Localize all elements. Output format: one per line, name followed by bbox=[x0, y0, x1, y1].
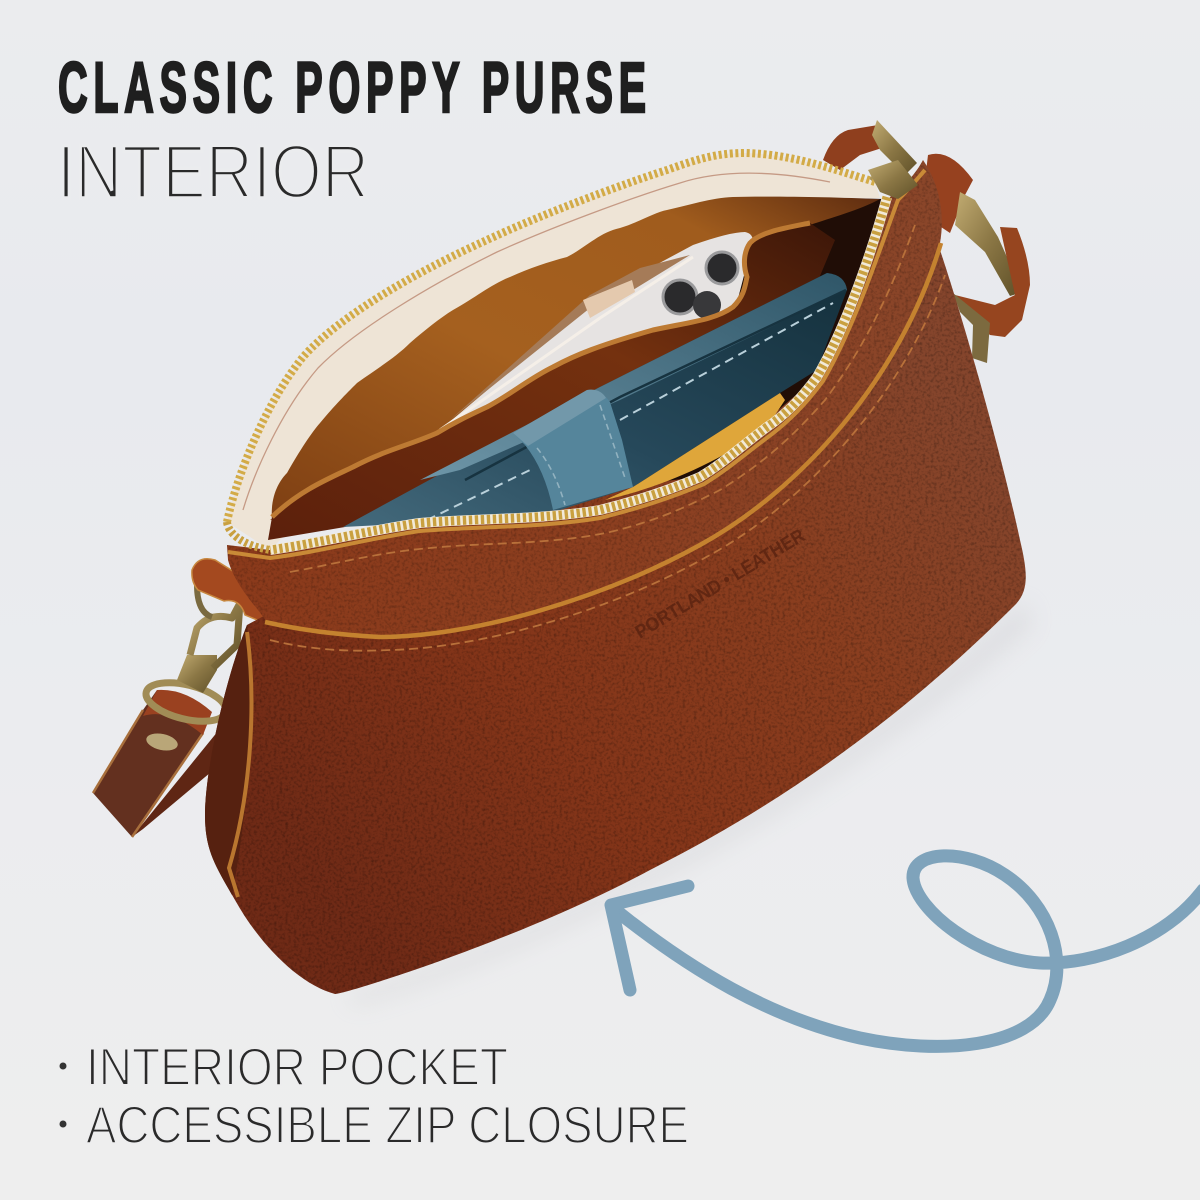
subtitle: INTERIOR bbox=[57, 130, 369, 215]
purse illustration bbox=[93, 120, 1032, 1005]
flap edge piping bbox=[265, 243, 941, 637]
zipper bbox=[227, 153, 887, 550]
right strap and clasps bbox=[823, 120, 1030, 363]
left clasp hardware bbox=[142, 585, 240, 728]
phone cameras bbox=[663, 280, 697, 314]
phone bbox=[440, 232, 753, 432]
logo stamp: PORTLAND • LEATHER bbox=[632, 525, 809, 643]
arrow bbox=[611, 856, 1200, 1046]
dark cavity bbox=[500, 197, 887, 500]
left piping bbox=[229, 632, 251, 897]
feature list bbox=[60, 1038, 689, 1155]
interior lining bbox=[227, 153, 880, 550]
inner suede flap bbox=[268, 223, 835, 540]
suede back pocket bbox=[270, 197, 880, 520]
title: CLASSIC POPPY PURSE bbox=[58, 48, 646, 128]
left strap bbox=[93, 690, 229, 837]
blue wallet bbox=[343, 273, 847, 527]
yellow inner card bbox=[605, 393, 785, 500]
purse body bbox=[205, 250, 1026, 994]
left loop bbox=[192, 559, 265, 622]
purse shadow bbox=[345, 600, 1032, 1005]
body left side panel bbox=[205, 625, 251, 895]
front flap bbox=[227, 160, 942, 637]
body stitching bbox=[270, 275, 945, 651]
bullet: accessible zip closure: ACCESSIBLE ZIP CLOSURE bbox=[86, 1096, 689, 1155]
lining stitch bbox=[243, 173, 830, 510]
wallet strap bbox=[513, 390, 633, 510]
right strap leather bbox=[925, 154, 973, 233]
top strap loop bbox=[823, 125, 882, 170]
bullet: interior pocket: INTERIOR POCKET bbox=[86, 1038, 508, 1097]
zipper pull bbox=[868, 160, 918, 199]
flap stitching bbox=[290, 225, 915, 572]
flap top edge bbox=[228, 170, 925, 558]
